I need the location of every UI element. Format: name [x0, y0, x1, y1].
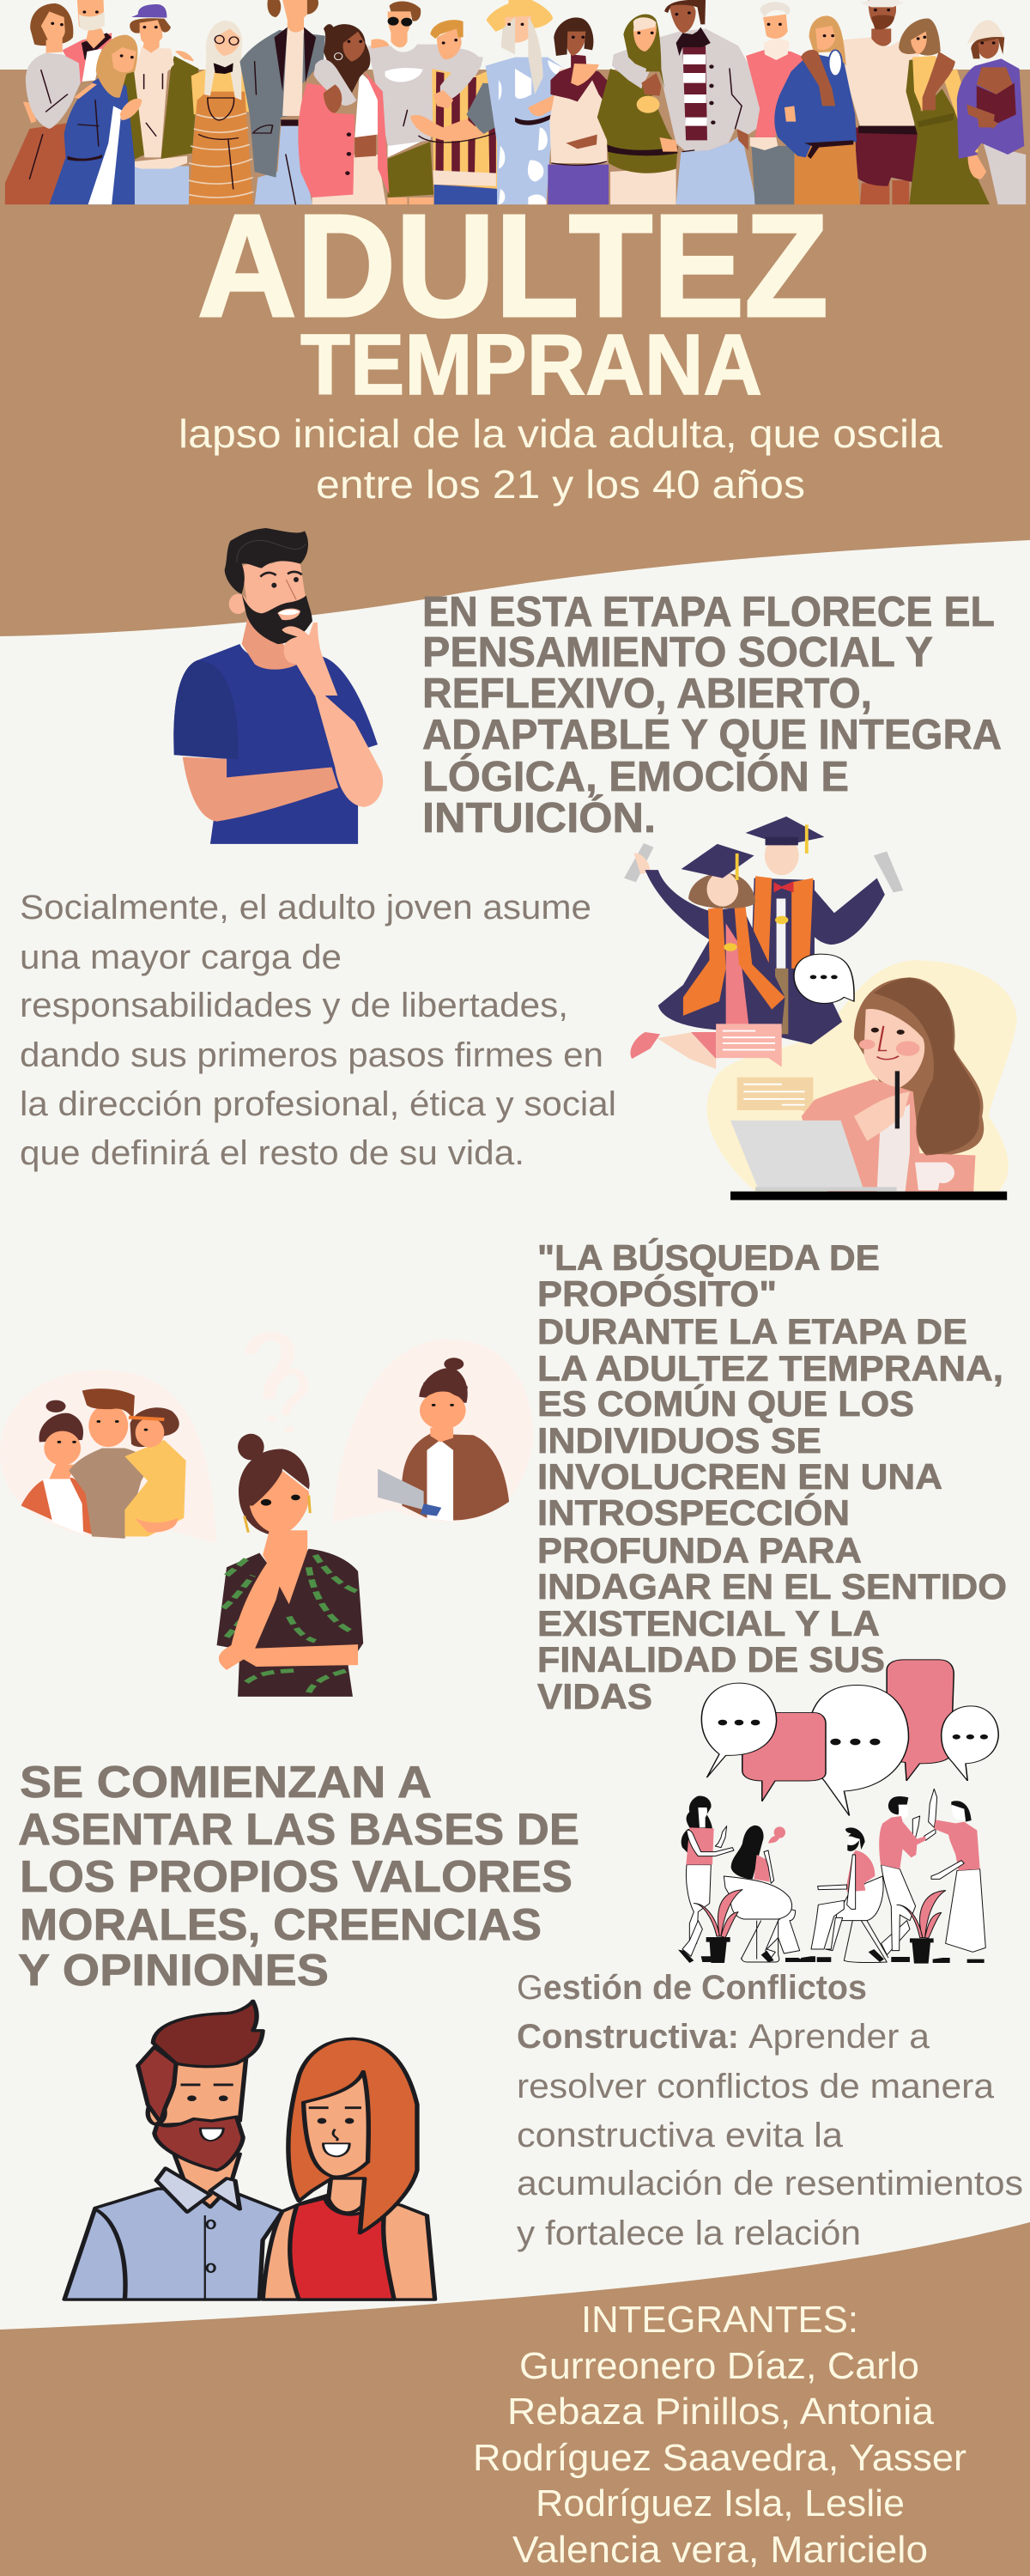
footer: integrantes: Gurreonero Díaz, Carlo: [519, 2345, 919, 2387]
thought bubble: career: [333, 1340, 533, 1522]
heading: valores: [18, 1758, 579, 1996]
man with striped vest: [410, 20, 501, 204]
woman with curly hair and pink jacket: [298, 24, 389, 204]
footer: integrantes: Rodríguez Saavedra, Yasser: [473, 2437, 966, 2479]
female graduate: [624, 843, 785, 1069]
intro text: entre los 21 y los 40 años: [316, 462, 805, 507]
paragraph: gestión de conflictos: [517, 1969, 1023, 2252]
woman with dark curly hair: [548, 17, 609, 204]
heading: valores: ASENTAR LAS BASES DE: [18, 1805, 579, 1855]
man with dreads and grey cardigan: [612, 0, 765, 204]
heading: pensamiento: REFLEXIVO, ABIERTO,: [422, 671, 872, 717]
paragraph: socialmente: una mayor carga de: [20, 939, 342, 976]
man with purple cap: [122, 4, 199, 204]
white bubble left: [701, 1683, 777, 1777]
heading: la búsqueda de propósito: PROPÓSITO": [537, 1273, 777, 1314]
paragraph: gestión de conflictos: acumulación de resentimientos: [517, 2165, 1023, 2202]
head and hand: [225, 528, 337, 696]
heading: pensamiento: EN ESTA ETAPA FLORECE EL: [422, 589, 995, 635]
plant left: [694, 1890, 742, 1963]
illustration: graduates and woman at laptop: [624, 817, 1017, 1200]
paragraph: gestión de conflictos: y fortalece la relación: [517, 2215, 861, 2252]
white speech bubble: [794, 954, 854, 1004]
heading: la búsqueda de propósito: VIDAS: [537, 1676, 652, 1716]
illustration: crowd of diverse adults: [5, 0, 1026, 204]
heading: la búsqueda de propósito: INDIVIDUOS SE: [537, 1420, 821, 1461]
seated bearded man: [800, 1827, 888, 1963]
heading: la búsqueda de propósito: INDAGAR EN EL SENTIDO: [537, 1566, 1007, 1607]
blonde woman in blue sweater: [774, 15, 860, 204]
intro text: [179, 411, 942, 507]
standing woman left: [678, 1795, 734, 1963]
tan message: [737, 1078, 813, 1116]
pink message: [716, 1024, 782, 1067]
man with white hat and cream tee: [840, 0, 919, 204]
heading: pensamiento: PENSAMIENTO SOCIAL Y: [422, 629, 933, 676]
heading: valores: SE COMIENZAN A: [20, 1758, 432, 1807]
illustration: bearded man thinking: [173, 528, 383, 844]
heading: la búsqueda de propósito: LA ADULTEZ TEMPRANA,: [537, 1348, 1003, 1388]
man: [64, 2001, 282, 2300]
footer: integrantes: INTEGRANTES:: [581, 2299, 858, 2341]
white haired woman with glasses: [188, 21, 255, 204]
paragraph: gestión de conflictos: constructiva evita la: [517, 2117, 844, 2154]
heading: la búsqueda de propósito: EXISTENCIAL Y LA: [537, 1603, 880, 1643]
thought bubble: family: [0, 1370, 217, 1544]
woman with yellow hat: [486, 0, 597, 204]
paragraph: gestión de conflictos: Aprender a: [748, 2018, 930, 2056]
subtitle: TEMPRANA: TEMPRANA: [300, 317, 762, 413]
heading: pensamiento: LÓGICA, EMOCIÓN E: [422, 753, 849, 800]
paragraph: socialmente: responsabilidades y de libertades,: [20, 987, 568, 1024]
crowd faces: [51, 9, 996, 58]
yellow blob: [707, 960, 1017, 1192]
illustration: smiling couple: [64, 2001, 435, 2300]
heading: la búsqueda de propósito: FINALIDAD DE SUS: [537, 1639, 885, 1680]
black desk bar: [730, 1192, 1007, 1200]
paragraph: socialmente: que definirá el resto de su vida.: [20, 1134, 524, 1172]
standing woman right: [929, 1789, 985, 1963]
paragraph: gestión de conflictos: Constructiva:: [517, 2018, 739, 2056]
heading: pensamiento: INTUICIÓN.: [422, 794, 656, 841]
paragraph: socialmente: dando sus primeros pasos firmes en: [20, 1036, 603, 1074]
heading: pensamiento: ADAPTABLE Y QUE INTEGRA: [422, 712, 1002, 758]
woman with olive hood: [597, 15, 678, 204]
illustration: people in conversation: [678, 1789, 985, 1964]
illustration: speech bubbles: [701, 1660, 998, 1816]
paragraph: gestión de conflictos: resolver conflictos de manera: [517, 2068, 995, 2105]
woman: [263, 2038, 435, 2300]
older man in pink sweater: [746, 2, 804, 204]
woman far left: [5, 3, 81, 204]
pink tall bubble: [887, 1660, 954, 1781]
paragraph: gestión de conflictos: Gestión de Conflictos: [517, 1969, 867, 2007]
heading: la búsqueda de propósito: [537, 1236, 1007, 1716]
intro text: lapso inicial de la vida adulta, que oscila: [179, 411, 942, 456]
title: ADULTEZ: ADULTEZ: [197, 185, 828, 348]
seated woman with long hair: [724, 1826, 807, 1962]
plant right: [897, 1891, 946, 1964]
woman with brown hair and olive dress: [899, 18, 990, 204]
heading: la búsqueda de propósito: DURANTE LA ETAPA DE: [537, 1311, 967, 1352]
heading: la búsqueda de propósito: INTROSPECCIÓN: [537, 1492, 850, 1533]
man with sunglasses and grey sweater: [368, 1, 482, 204]
question marks: [251, 1336, 304, 1432]
right half of crowd: [486, 0, 1026, 204]
white bubble large: [808, 1686, 908, 1816]
standing man: [869, 1796, 936, 1962]
footer brown band with wave: [0, 2222, 1030, 2576]
paragraph: socialmente: la dirección profesional, ética y social: [20, 1085, 616, 1123]
thinking woman figure: [217, 1434, 363, 1697]
male graduate: [746, 817, 903, 1044]
footer: integrantes: Valencia vera, Maricielo: [512, 2529, 928, 2571]
pink bubble left: [742, 1713, 826, 1801]
torso: [173, 644, 383, 844]
heading: la búsqueda de propósito: INVOLUCREN EN UNA: [537, 1456, 942, 1497]
woman with hat and purple jacket: [957, 20, 1026, 204]
heading: valores: Y OPINIONES: [18, 1946, 329, 1996]
paragraph: socialmente: [20, 889, 616, 1172]
heading: valores: LOS PROPIOS VALORES: [20, 1852, 573, 1902]
footer: integrantes: [473, 2299, 966, 2571]
footer: integrantes: Rebaza Pinillos, Antonia: [507, 2391, 935, 2433]
paragraph: socialmente: Socialmente, el adulto joven asume: [20, 889, 591, 927]
illustration: woman imagining family and career: [0, 1336, 533, 1697]
heading: la búsqueda de propósito: PROFUNDA PARA: [537, 1530, 862, 1571]
footer: integrantes: Rodríguez Isla, Leslie: [536, 2482, 905, 2524]
woman with laptop: [730, 977, 984, 1192]
older man behind: [63, 0, 112, 83]
heading: pensamiento: [422, 589, 1002, 841]
heading: la búsqueda de propósito: ES COMÚN QUE LOS: [537, 1382, 914, 1424]
blonde woman in blue coat: [49, 35, 142, 204]
tall man in grey blazer: [239, 0, 325, 204]
header brown band with wave: [0, 70, 1030, 636]
heading: la búsqueda de propósito: "LA BÚSQUEDA DE: [537, 1236, 880, 1278]
white bubble right: [942, 1706, 998, 1781]
heading: valores: MORALES, CREENCIAS: [20, 1900, 542, 1950]
